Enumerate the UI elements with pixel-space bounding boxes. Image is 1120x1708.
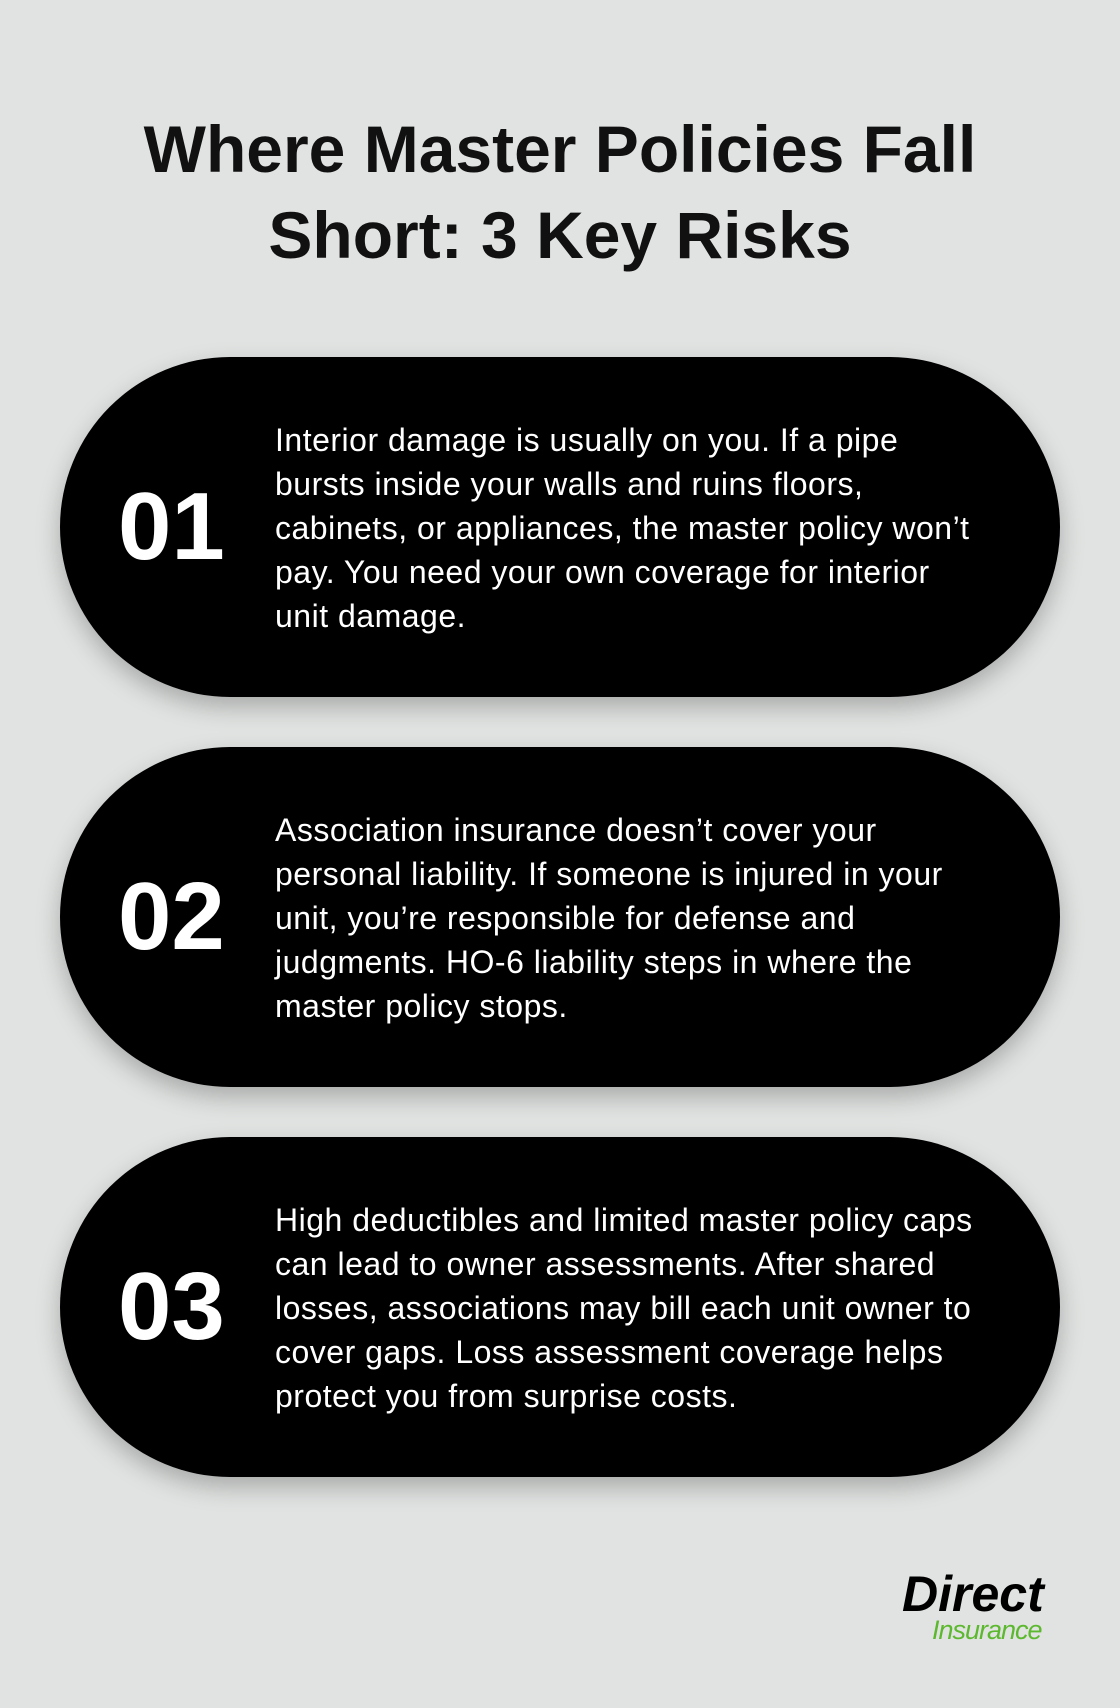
text 01: bursts inside your walls and ruins floors, xyxy=(275,466,863,502)
logo: Direct xyxy=(902,1566,1044,1622)
number 03: 03 xyxy=(118,1253,225,1360)
panel: risk 02 xyxy=(60,747,1060,1087)
text 02: master policy stops. xyxy=(275,988,568,1024)
text 01 xyxy=(275,422,970,634)
text 03: cover gaps. Loss assessment coverage helps xyxy=(275,1334,943,1370)
text 03: protect you from surprise costs. xyxy=(275,1378,737,1414)
text 02: personal liability. If someone is injured in your xyxy=(275,856,943,892)
panel: risk 03 xyxy=(60,1137,1060,1477)
text 02 xyxy=(274,812,943,1024)
text 03 xyxy=(275,1202,973,1414)
logo: Insurance xyxy=(932,1615,1042,1645)
text 01: pay. You need your own coverage for interior xyxy=(275,554,930,590)
text 03: can lead to owner assessments. After shared xyxy=(275,1246,935,1282)
text 03: High deductibles and limited master policy caps xyxy=(275,1202,973,1238)
text 02: unit, you’re responsible for defense and xyxy=(275,900,855,936)
title: Where Master Policies Fall xyxy=(144,112,976,186)
title xyxy=(144,112,976,272)
number 02: 02 xyxy=(118,863,225,970)
title: Short: 3 Key Risks xyxy=(268,198,852,272)
text 02: Association insurance doesn’t cover your xyxy=(275,812,877,848)
text 02: judgments. HO-6 liability steps in where the xyxy=(275,944,912,980)
text 03: losses, associations may bill each unit owner to xyxy=(275,1290,971,1326)
text 01: Interior damage is usually on you. If a pipe xyxy=(275,422,898,458)
text 01: unit damage. xyxy=(275,598,466,634)
text 01: cabinets, or appliances, the master policy won’t xyxy=(275,510,970,546)
number 01: 01 xyxy=(118,473,225,580)
panel: risk 01 xyxy=(60,357,1060,697)
